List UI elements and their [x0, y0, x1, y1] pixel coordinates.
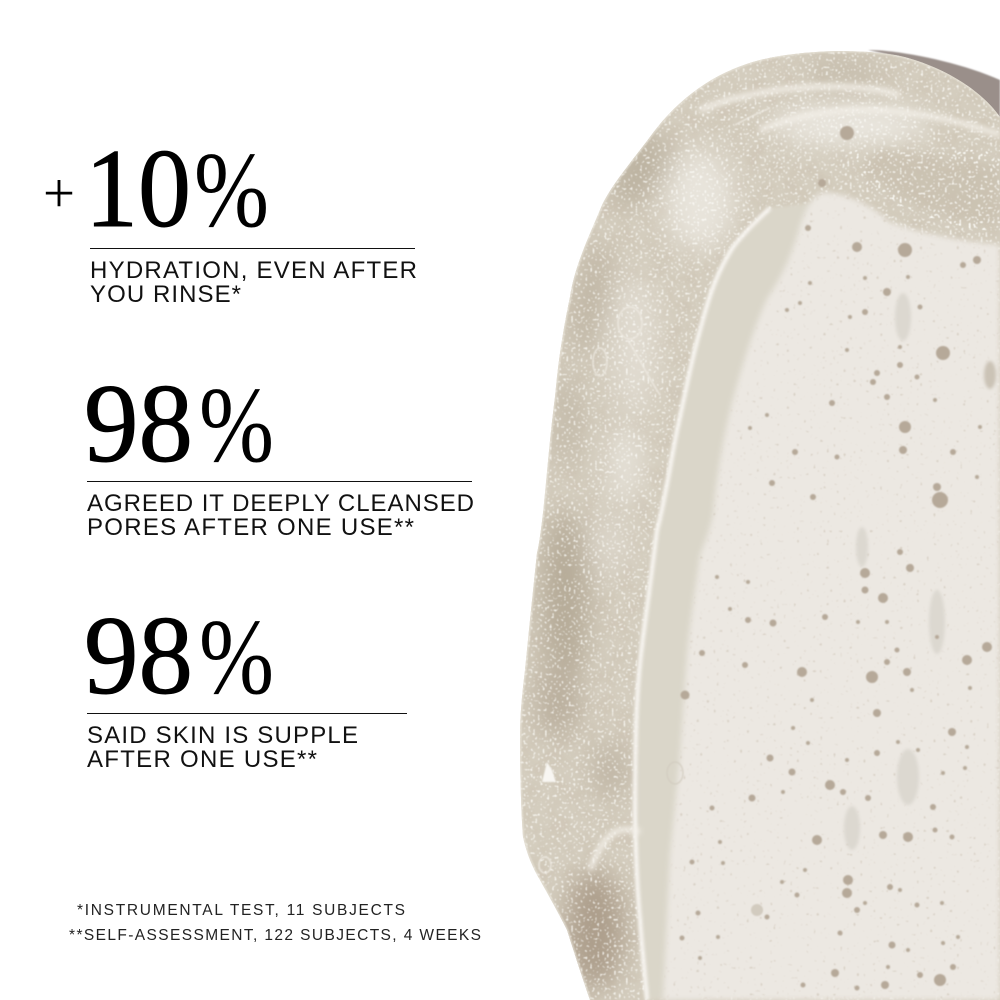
clear centre: [663, 192, 1000, 1000]
stat 3: 98% supple skin: [84, 594, 407, 773]
textured outer band: [500, 30, 1000, 1000]
smooth mid band: [637, 202, 808, 1000]
number 98: 98: [84, 594, 193, 718]
percent sign: %: [199, 598, 274, 717]
label: SAID SKIN IS SUPPLE: [87, 722, 358, 749]
loose air rings in band: [539, 108, 770, 873]
number 98: 98: [84, 362, 193, 486]
fine specks in centre: [660, 180, 1000, 1000]
sparkle texture: [500, 30, 1000, 1000]
stat 1: +10% hydration: [43, 127, 417, 308]
label: HYDRATION, EVEN AFTER: [90, 257, 417, 284]
gel swatch: [500, 30, 1000, 1000]
label: YOU RINSE*: [90, 281, 241, 308]
footnotes: **SELF-ASSESSMENT, 122 SUBJECTS, 4 WEEKS: [69, 927, 481, 944]
percent sign: %: [194, 131, 269, 250]
rule: [87, 713, 407, 714]
bubbles: [680, 126, 992, 990]
label: AGREED IT DEEPLY CLEANSED: [87, 490, 474, 517]
plus sign: +: [43, 163, 75, 225]
footnotes: *INSTRUMENTAL TEST, 11 SUBJECTS: [77, 902, 405, 919]
number 10: 10: [85, 127, 191, 251]
soft gel edge: [520, 51, 1000, 1000]
white highlight ridge: [635, 208, 770, 1000]
label: AFTER ONE USE**: [87, 746, 317, 773]
translucent ovals: [844, 293, 996, 850]
percent sign: %: [199, 366, 274, 485]
rule: [87, 481, 472, 482]
rule: [90, 248, 415, 249]
top rim: [900, 50, 1000, 117]
soft texture over top of centre: [860, 150, 1000, 226]
cast shadow of gel: [868, 50, 1000, 122]
label: PORES AFTER ONE USE**: [87, 514, 414, 541]
stat 2: 98% deeply cleansed: [84, 362, 474, 541]
